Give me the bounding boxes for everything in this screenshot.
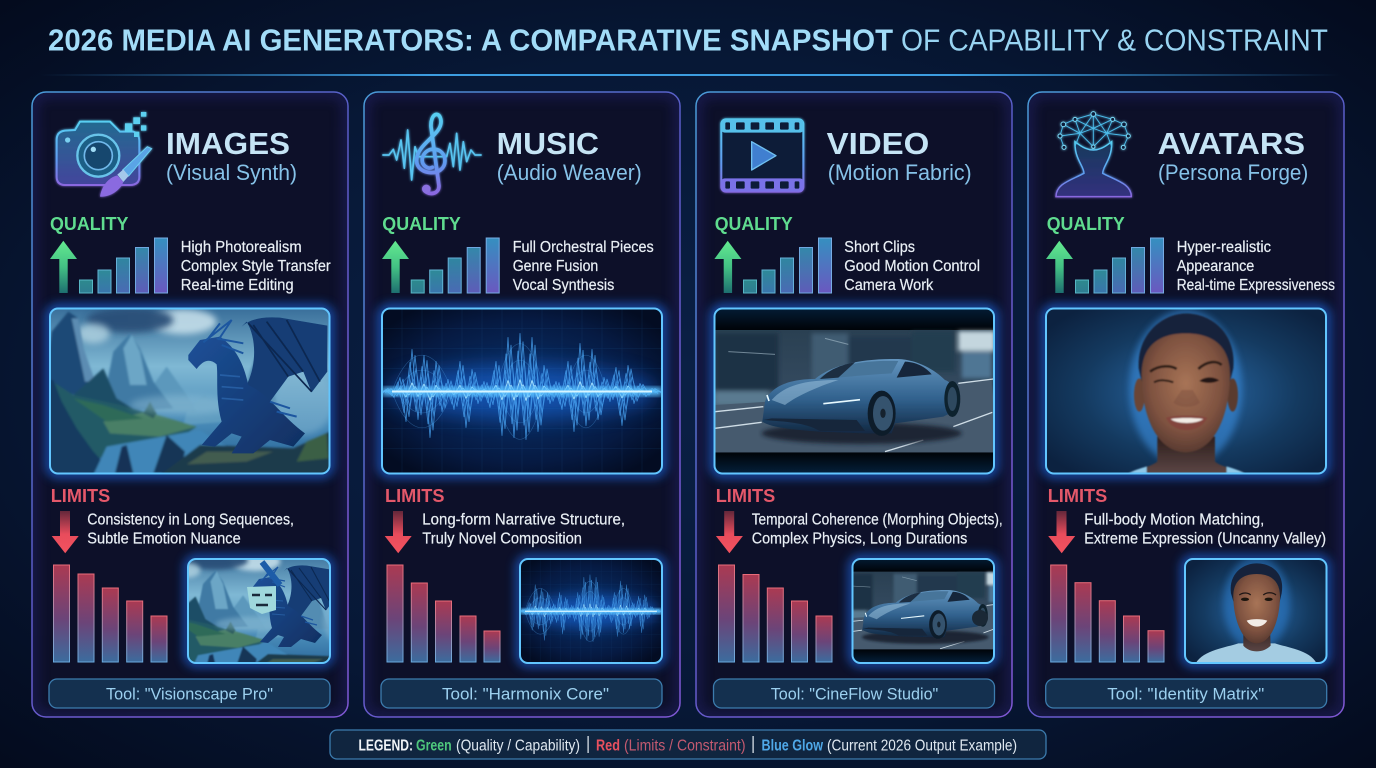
- limits arrow: [716, 511, 743, 553]
- limits list: Consistency in Long Sequences,: [87, 511, 294, 528]
- heading: avatars: (Persona Forge): [1158, 160, 1308, 185]
- limits label: LIMITS: [1048, 485, 1107, 506]
- quality arrow: [382, 241, 409, 293]
- limits list: [752, 511, 1003, 547]
- limits list: Extreme Expression (Uncanny Valley): [1084, 530, 1326, 547]
- quality label: QUALITY: [1047, 213, 1125, 234]
- example image: sports car: [705, 305, 1005, 482]
- icon: camera and paintbrush: [57, 112, 152, 197]
- limits arrow: [385, 511, 412, 553]
- quality arrow: [714, 241, 741, 293]
- legend: LEGEND:: [358, 738, 413, 754]
- quality list: High Photorealism: [181, 239, 302, 256]
- panel: video: [696, 92, 1016, 717]
- example image: waveform: [379, 308, 662, 474]
- legend: (Limits / Constraint): [624, 738, 746, 754]
- tool label: Tool: "Identity Matrix": [1107, 685, 1264, 703]
- heading: avatars: [1158, 126, 1308, 185]
- example image: winking face: [1040, 305, 1340, 480]
- legend: [330, 730, 1046, 759]
- limits list: Temporal Coherence (Morphing Objects),: [752, 511, 1003, 528]
- quality arrow: [1046, 241, 1073, 293]
- quality label: QUALITY: [715, 213, 793, 234]
- limits list: Subtle Emotion Nuance: [87, 530, 241, 547]
- quality list: Short Clips: [844, 239, 915, 256]
- icon: treble clef with waveform: [382, 114, 482, 194]
- quality list: Good Motion Control: [844, 258, 980, 275]
- tool label: [1046, 679, 1327, 708]
- heading: video: [827, 126, 972, 185]
- limits list: Long-form Narrative Structure,: [422, 511, 625, 528]
- legend: (Current 2026 Output Example): [827, 738, 1017, 754]
- panel: music: [364, 92, 680, 717]
- tool label: Tool: "Harmonix Core": [442, 685, 609, 703]
- limits label: LIMITS: [716, 485, 775, 506]
- heading: images: [166, 126, 297, 185]
- quality list: Genre Fusion: [513, 258, 598, 275]
- heading: images: (Visual Synth): [166, 160, 297, 185]
- quality list: Camera Work: [844, 277, 934, 294]
- tool label: Tool: "Visionscape Pro": [106, 685, 273, 703]
- limits arrow: [52, 511, 79, 553]
- icon: film strip with play button: [721, 119, 803, 192]
- limits arrow: [1048, 511, 1075, 553]
- heading: video: VIDEO: [827, 126, 929, 161]
- title: OF CAPABILITY & CONSTRAINT: [901, 22, 1328, 58]
- tool label: [714, 679, 994, 708]
- heading: music: [497, 126, 642, 185]
- limit example: small waveform: [518, 559, 662, 663]
- quality bar chart: [744, 238, 832, 293]
- limits bar chart: [387, 565, 500, 662]
- heading: images: IMAGES: [166, 126, 290, 161]
- heading: video: (Motion Fabric): [828, 160, 972, 185]
- limit example: full-body portrait: [1183, 557, 1330, 667]
- limits list: Truly Novel Composition: [422, 530, 582, 547]
- quality list: Complex Style Transfer: [181, 258, 331, 275]
- limits label: LIMITS: [385, 485, 444, 506]
- limits label: LIMITS: [51, 485, 110, 506]
- quality list: Hyper-realistic: [1177, 239, 1271, 256]
- heading: music: MUSIC: [497, 126, 599, 161]
- quality list: [513, 239, 654, 294]
- quality bar chart: [411, 238, 499, 293]
- limit example: morphing car: [826, 556, 1016, 668]
- panel frame: [1028, 92, 1344, 717]
- heading: avatars: AVATARS: [1158, 126, 1305, 161]
- quality list: Vocal Synthesis: [513, 277, 615, 294]
- legend: Green: [416, 738, 452, 754]
- quality label: QUALITY: [50, 213, 129, 234]
- limits bar chart: [54, 565, 167, 662]
- quality label: QUALITY: [382, 213, 461, 234]
- tool label: Tool: "CineFlow Studio": [771, 685, 938, 703]
- panel frame: [32, 92, 348, 717]
- limits bar chart: [1051, 565, 1164, 662]
- limits list: [1084, 511, 1326, 547]
- quality list: Full Orchestral Pieces: [513, 239, 654, 256]
- panel frame: [696, 92, 1012, 717]
- quality list: [844, 239, 980, 294]
- limit example: glitched dragon: [176, 548, 342, 674]
- icon: head with neural network: [1056, 112, 1131, 197]
- quality bar chart: [1076, 238, 1164, 293]
- tool label: [49, 679, 330, 708]
- quality list: [181, 239, 331, 294]
- panel: images: [32, 92, 373, 717]
- limits bar chart: [718, 565, 832, 662]
- quality list: [1177, 239, 1335, 294]
- panel: avatars: [1028, 92, 1344, 717]
- quality list: Appearance: [1177, 258, 1254, 275]
- limits list: [87, 511, 294, 547]
- limits list: [422, 511, 625, 547]
- quality bar chart: [80, 238, 168, 293]
- limits list: Complex Physics, Long Durations: [752, 530, 968, 547]
- example image: dragon: [40, 305, 340, 480]
- tool label: [381, 679, 662, 708]
- legend: Blue Glow: [762, 738, 824, 754]
- quality arrow: [50, 241, 77, 293]
- panel frame: [364, 92, 680, 717]
- legend: (Quality / Capability): [456, 738, 580, 754]
- heading: music: (Audio Weaver): [497, 160, 642, 185]
- quality list: Real-time Editing: [181, 277, 294, 294]
- quality list: Real-time Expressiveness: [1177, 277, 1335, 294]
- title: 2026 MEDIA AI GENERATORS: A COMPARATIVE SNAPSHOT: [48, 22, 893, 58]
- title: [48, 22, 1328, 58]
- legend: Red: [596, 738, 620, 754]
- limits list: Full-body Motion Matching,: [1084, 511, 1264, 528]
